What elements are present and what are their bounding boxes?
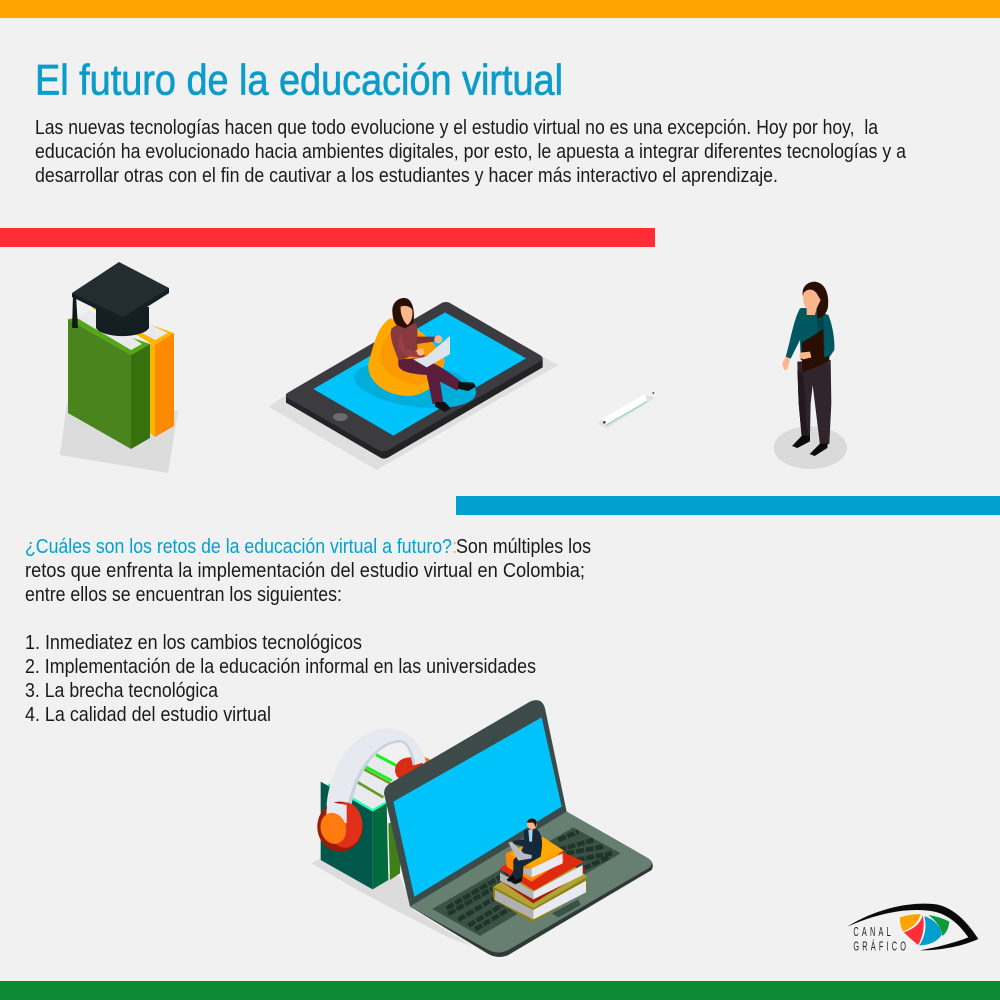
title: El futuro de la educación virtual (35, 56, 563, 104)
challenges text block: retos que enfrenta la implementación del estudio virtual en Colombia; (25, 560, 585, 582)
logo: Canal Gráfico eye: CANAL (853, 925, 891, 940)
intro paragraph: Las nuevas tecnologías hacen que todo evolucione y el estudio virtual no es una excepción. Hoy por hoy, la (35, 117, 879, 139)
intro paragraph: educación ha evolucionado hacia ambientes digitales, por esto, le apuesta a integrar diferentes tecnologías y a (35, 141, 907, 163)
challenges text block (25, 536, 591, 726)
challenges text block: 4. La calidad del estudio virtual (25, 704, 271, 726)
challenges text block: 1. Inmediatez en los cambios tecnológicos (25, 632, 362, 654)
icon: tablet with woman on beanbag (268, 298, 558, 470)
challenges text block: ¿Cuáles son los retos de la educación virtual a futuro? (25, 536, 452, 558)
bottom green bar (0, 981, 1000, 1000)
icon: laptop with books and headphones (312, 700, 653, 957)
intro paragraph (35, 117, 907, 187)
icon: white pen (597, 392, 656, 429)
blue divider bar (456, 496, 1000, 515)
logo: Canal Gráfico eye: GRÁFICO (853, 938, 906, 954)
red divider bar (0, 228, 655, 247)
logo: Canal Gráfico eye (847, 904, 978, 954)
intro paragraph: desarrollar otras con el fin de cautivar a los estudiantes y hacer más interactivo el aprendizaje. (35, 165, 778, 187)
challenges text block: Son múltiples los (456, 536, 591, 558)
challenges text block: entre ellos se encuentran los siguientes: (25, 584, 342, 606)
icon: standing woman with folder (774, 282, 847, 469)
top orange bar (0, 0, 1000, 18)
icon: books with graduation cap (60, 262, 178, 473)
challenges text block: 3. La brecha tecnológica (25, 680, 219, 702)
challenges text block: : (452, 536, 458, 558)
challenges text block: 2. Implementación de la educación informal en las universidades (25, 656, 536, 678)
